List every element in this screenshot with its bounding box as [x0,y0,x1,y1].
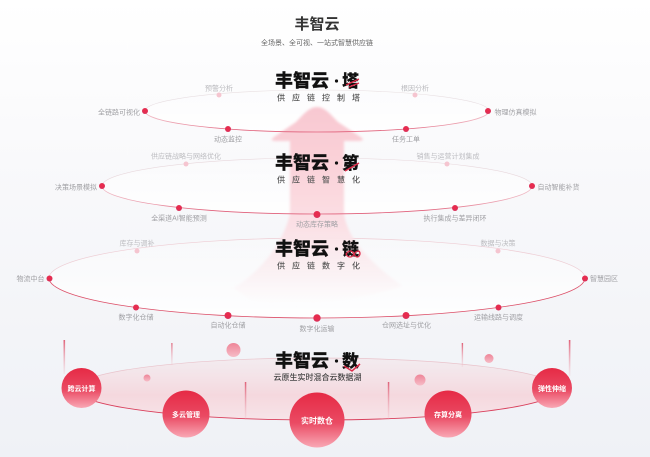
labels and dots: control tower layer: 任务工单 [392,134,420,144]
node: 跨云计算 [62,368,102,408]
logo: digital [275,238,360,259]
subtitle: 全场景、全可视、一站式智慧供应链 [261,38,373,47]
ellipse: digital layer [49,238,585,318]
labels and dots: digital layer: 数字化仓储 [118,312,154,322]
labels and dots: digital layer [16,238,618,333]
ellipse front rim: intelligence [102,186,532,214]
ellipse: intelligence layer [102,158,532,214]
logo: control tower: 塔 [342,72,359,91]
sub heading: digital: 供应链数字化 [277,260,367,270]
labels and dots: control tower layer: 预警分析 [205,84,233,92]
logo: intelligence: 第 [342,153,359,173]
floating small spheres [144,343,494,386]
logo: digital: 链 [342,239,359,259]
labels and dots: control tower layer: 物理仿真模拟 [494,108,536,116]
vertical light lines [64,340,570,420]
labels and dots: intelligence layer: 销售与运营计划集成 [416,152,480,160]
data lake base platter [75,358,559,420]
logo: data [275,350,360,371]
sub heading: control tower: 供应链控制塔 [277,92,367,102]
node: 跨云计算: 跨云计算 [68,384,96,393]
logo: digital: 丰智云 [275,238,329,259]
labels and dots: digital layer: 运输线路与调度 [474,312,523,322]
logo: data: 数 [342,351,359,371]
labels and dots: digital layer: 物流中台 [16,274,44,283]
labels and dots: digital layer: 库存与调补 [120,238,154,248]
labels and dots: digital layer: 数字化运输 [300,324,334,333]
labels and dots: intelligence layer: 执行集成与差异闭环 [424,214,486,222]
node: 弹性伸缩 [532,368,572,408]
logo: control tower: 丰智云 [275,70,329,91]
labels and dots: intelligence layer: 全渠道AI智能预测 [151,214,207,222]
labels and dots: intelligence layer: 自动智能补货 [538,182,580,192]
labels and dots: intelligence layer: 决策场景模拟 [55,182,97,192]
labels and dots: control tower layer [98,84,536,144]
labels and dots: intelligence layer: 供应链战略与网络优化 [151,152,221,160]
node: 实时数仓: 实时数仓 [301,416,333,426]
title: 丰智云 [294,15,340,33]
node: 弹性伸缩: 弹性伸缩 [538,384,566,393]
logo: control tower [275,70,359,91]
labels and dots: intelligence layer [55,152,580,228]
ellipse front rim: control tower [145,111,489,132]
labels and dots: control tower layer: 动态监控 [214,134,242,144]
sub heading: data: 云原生实时混合云数据湖 [274,372,362,382]
node: 多云管理 [162,390,210,438]
labels and dots: digital layer: 仓网选址与优化 [382,320,431,330]
labels and dots: intelligence layer: 动态库存策略 [296,220,338,228]
logo: intelligence: 丰智云 [275,152,329,173]
labels and dots: digital layer: 自动化仓储 [210,320,246,330]
node: 实时数仓 [290,392,344,448]
ellipse front rim: digital [49,278,585,318]
logo: intelligence [275,152,359,173]
labels and dots: control tower layer: 根因分析 [401,84,429,92]
labels and dots: digital layer: 智慧园区 [590,274,618,283]
sub heading: intelligence: 供应链智慧化 [277,174,367,184]
ellipse: control tower layer [145,90,489,132]
logo: data: 丰智云 [275,350,329,371]
arrow: upward pink [234,107,402,305]
labels and dots: digital layer: 数据与决策 [480,238,516,248]
labels and dots: control tower layer: 全链路可视化 [98,108,140,116]
node: 多云管理: 多云管理 [172,410,200,419]
node: 存算分离 [424,390,472,438]
node: 存算分离: 存算分离 [434,410,462,419]
